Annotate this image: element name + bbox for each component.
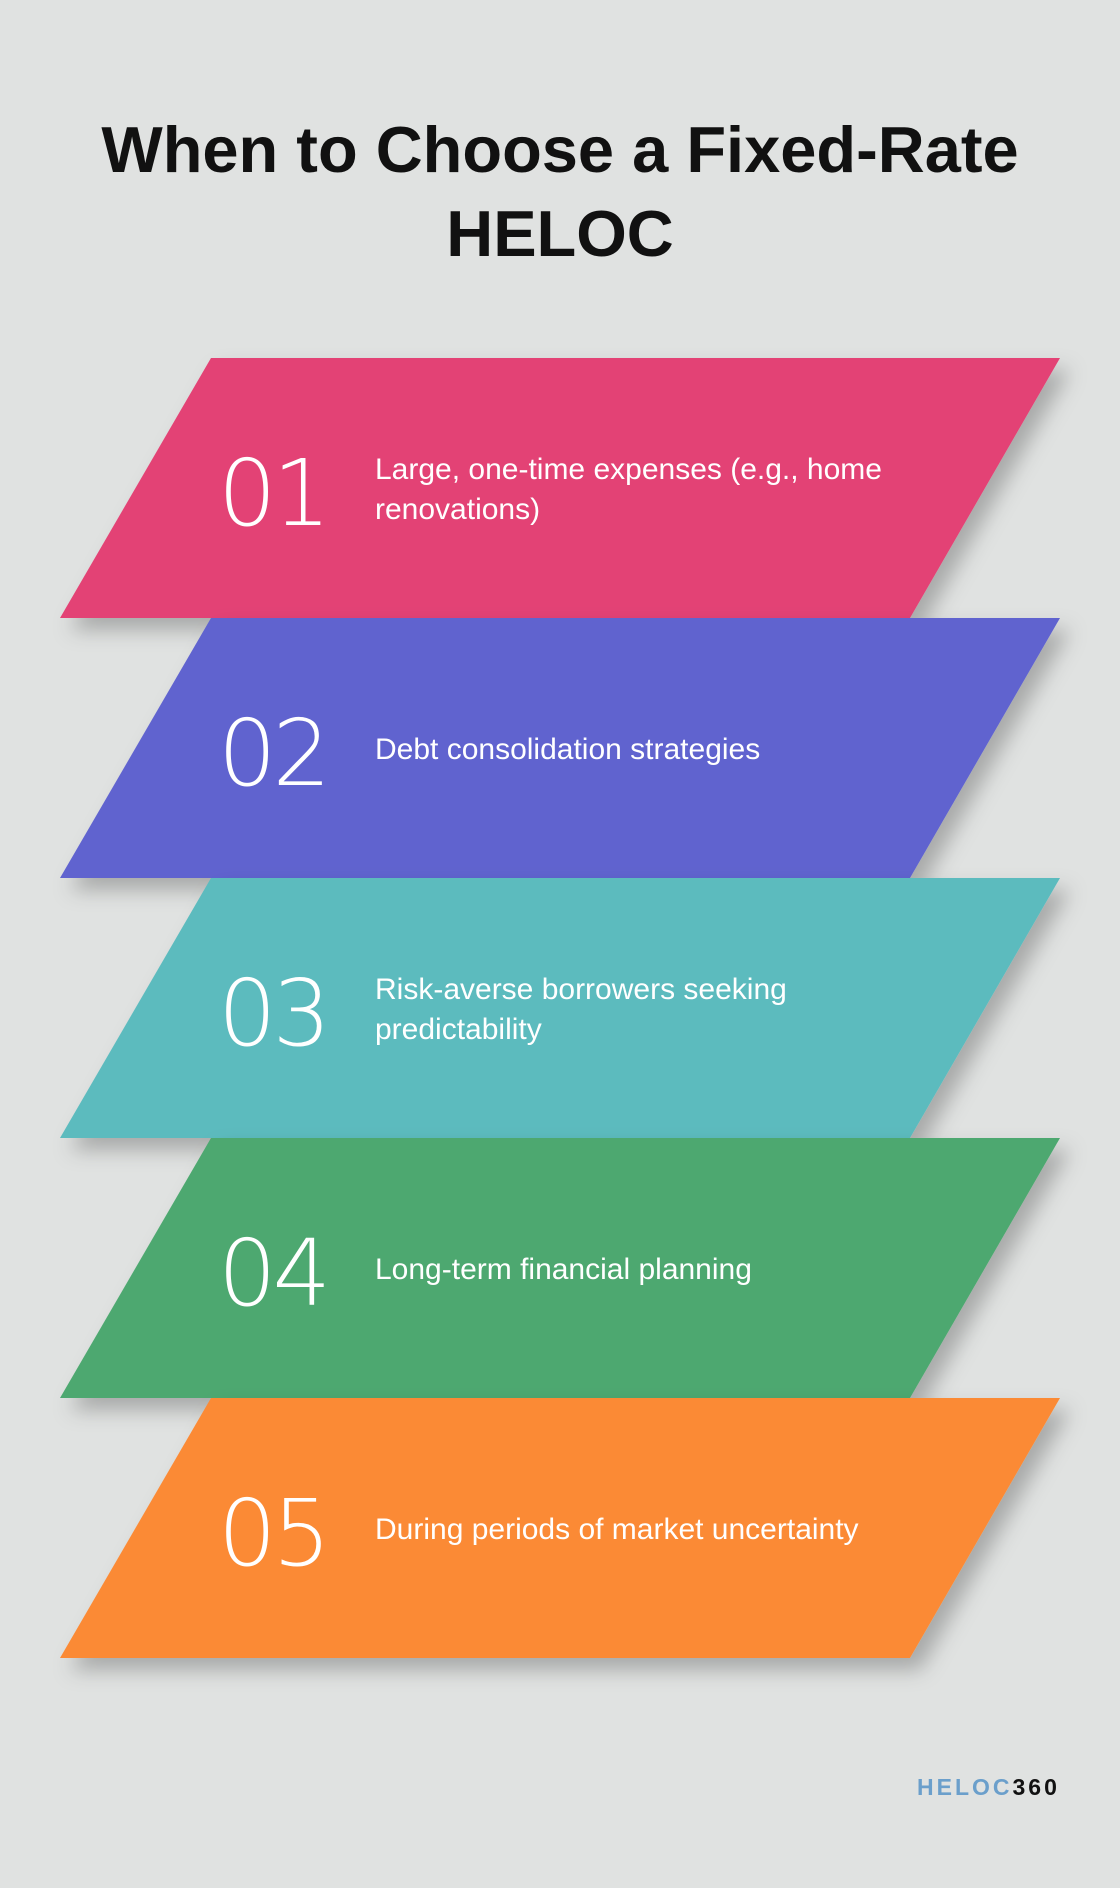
step 01: 01 [218,440,327,547]
step 02: 02 [218,700,327,807]
step 05: 05 [218,1480,327,1587]
step 04 [218,1220,752,1327]
step 05: During periods of market uncertainty [375,1513,859,1546]
step 03: 03 [218,960,327,1067]
step 01: Large, one-time expenses (e.g., home renovations) [375,453,882,526]
step 04: 04 [218,1220,327,1327]
step 01 [218,440,882,547]
step 05 [218,1480,859,1587]
title: When to Choose a Fixed-Rate [101,113,1019,186]
logo: HELOC360 [917,1774,1060,1800]
step 02: Debt consolidation strategies [375,733,760,766]
title [101,113,1019,270]
step 02 [218,700,760,807]
step 03 [218,960,787,1067]
title: HELOC [446,197,674,270]
step 04: Long-term financial planning [375,1253,752,1286]
step 03: Risk-averse borrowers seeking predictability [375,973,787,1046]
